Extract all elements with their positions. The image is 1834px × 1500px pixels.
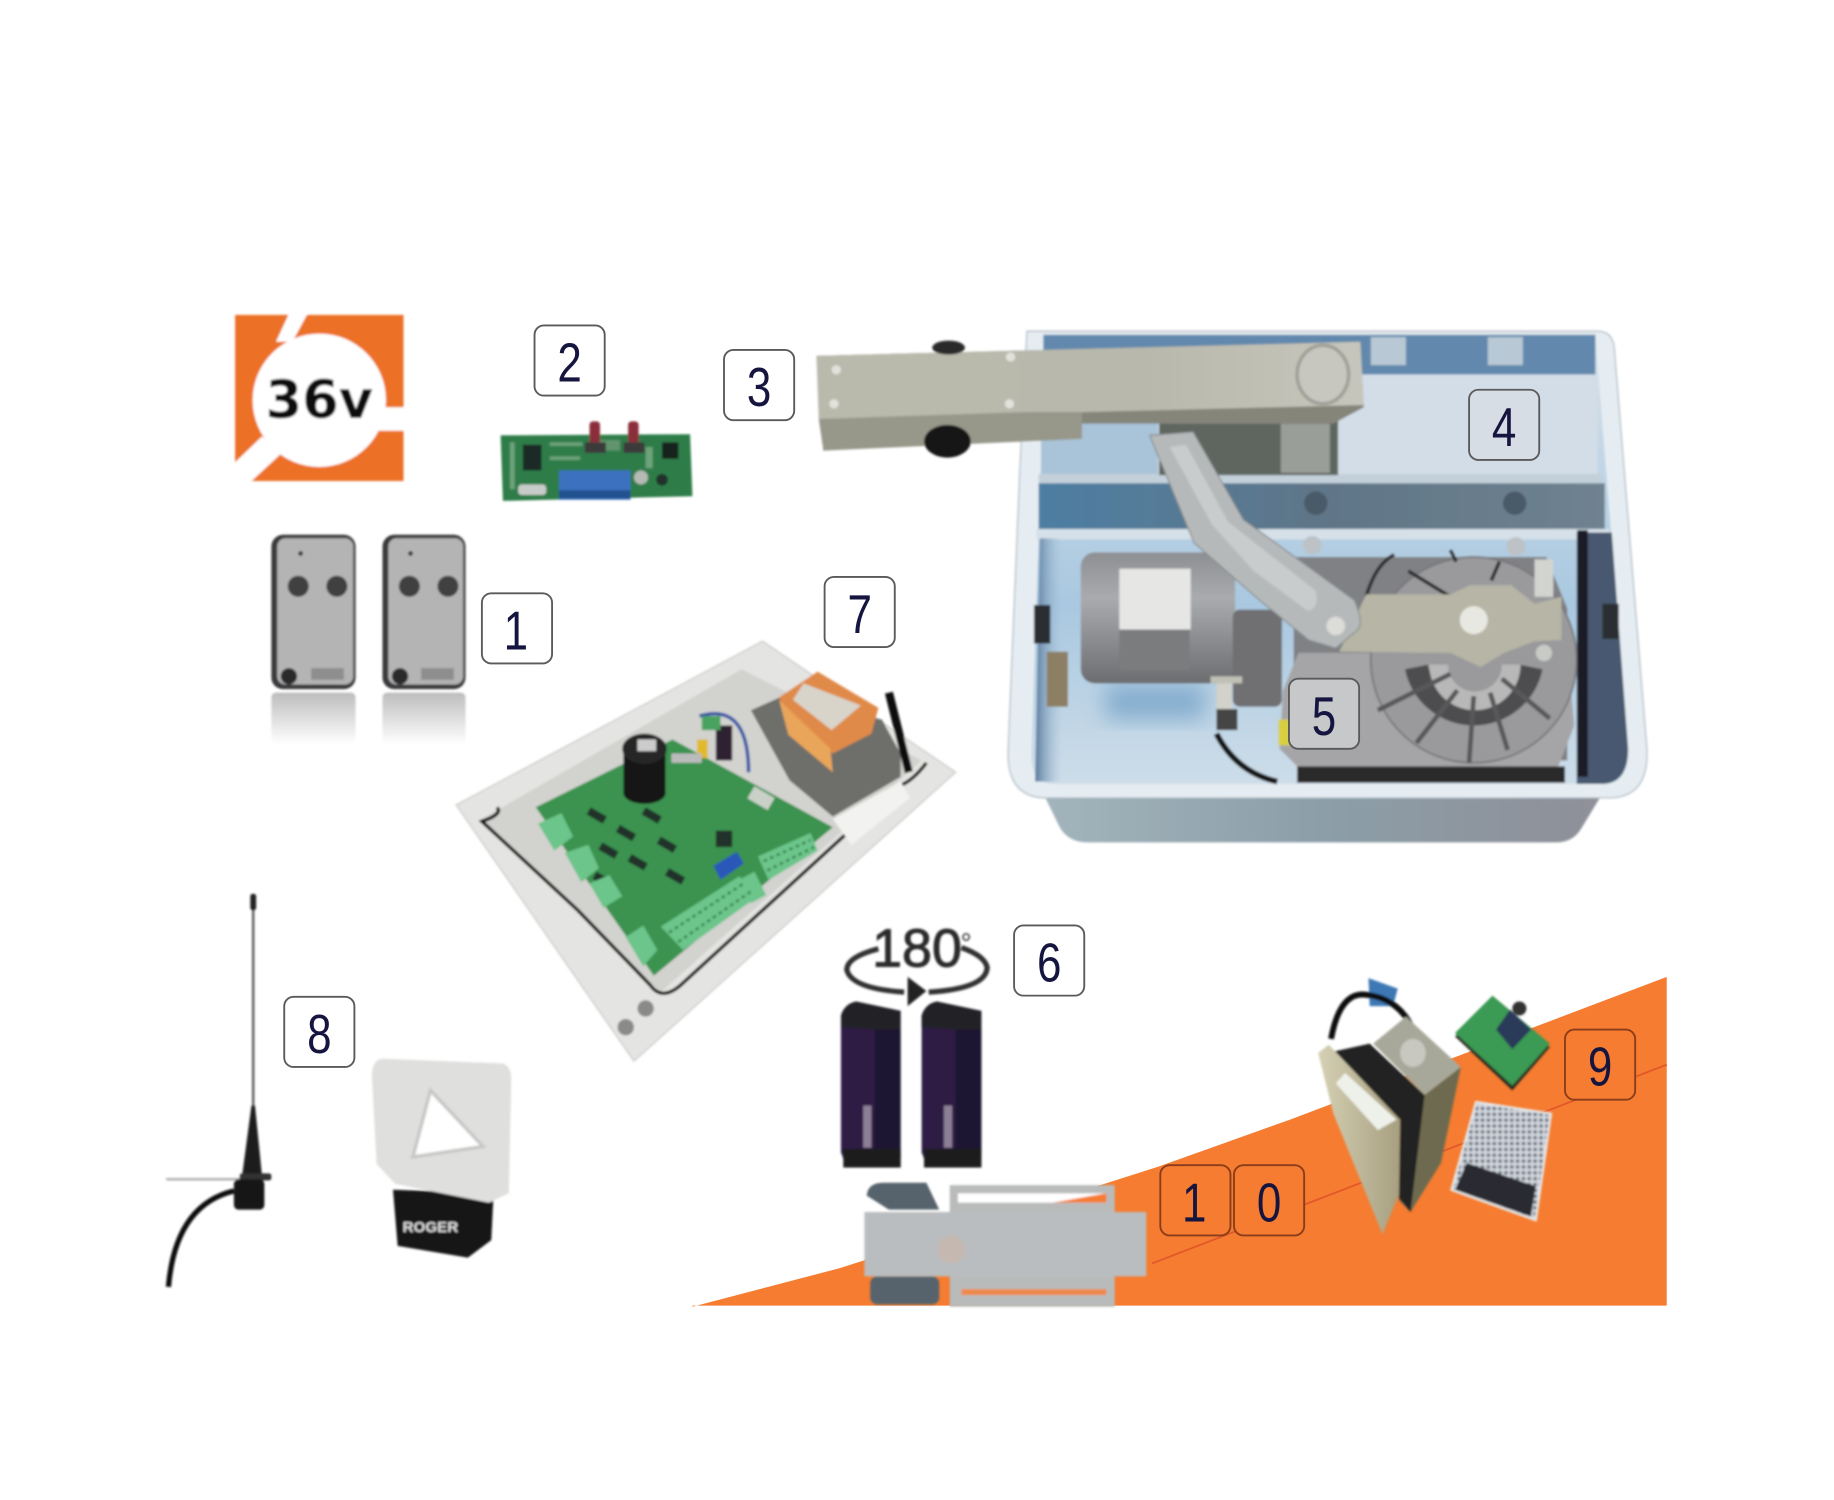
blue connector — [1368, 978, 1398, 1006]
label 2: 2 — [557, 332, 582, 394]
maglock plate — [1318, 1045, 1400, 1234]
sensor cable and connector — [1211, 530, 1583, 782]
label 3: 3 — [747, 356, 771, 418]
lock backplate — [950, 1185, 1115, 1307]
power supply — [1452, 1102, 1551, 1220]
rotation symbol — [847, 918, 987, 1006]
white fuse block — [833, 782, 910, 845]
icon: 36v logo — [232, 311, 407, 484]
flashing lamp — [372, 1059, 511, 1258]
label 1: 1 — [504, 600, 528, 662]
lever hub — [1460, 606, 1488, 634]
maglock right block — [1373, 1017, 1461, 1212]
blue trimmer — [713, 852, 744, 880]
label 7: 7 — [847, 583, 872, 645]
upper lever — [1150, 432, 1360, 648]
back wall bands — [1036, 335, 1609, 539]
label 10: 0 — [1257, 1172, 1281, 1234]
label 7 — [825, 577, 895, 647]
floor shadow below motor — [1105, 684, 1205, 720]
label 5: 5 — [1312, 685, 1336, 747]
label 10 — [1160, 1165, 1304, 1235]
label 6: 6 — [1037, 932, 1061, 994]
motor cylinder — [1081, 552, 1282, 707]
label 3 — [724, 350, 794, 420]
antenna — [166, 894, 271, 1287]
rotation symbol: ° — [961, 927, 972, 958]
capacitor — [622, 734, 667, 804]
blue wires — [699, 714, 749, 772]
left and right wall shading — [1035, 532, 1628, 784]
control unit — [456, 641, 956, 1061]
tray interior — [1031, 335, 1628, 784]
number labels — [284, 325, 1635, 1235]
gasket — [482, 763, 926, 993]
terminal pins — [669, 840, 814, 942]
remote controls — [271, 535, 466, 744]
terminal blocks — [538, 813, 818, 966]
lock dark rollers — [867, 1183, 939, 1304]
corner screw holes — [618, 1000, 654, 1035]
remote right — [382, 535, 466, 689]
label 4 — [1469, 390, 1539, 460]
pivot block under arm — [1159, 419, 1338, 475]
lamp base — [393, 1190, 494, 1258]
lamp lens — [372, 1059, 511, 1203]
label 8 — [284, 997, 354, 1067]
photocells — [841, 918, 987, 1168]
label 8: 8 — [307, 1003, 332, 1065]
gearbox housing — [1280, 536, 1577, 783]
tray rim — [1008, 331, 1647, 798]
rotation symbol: 180 — [872, 918, 962, 978]
label 10: 1 — [1182, 1172, 1206, 1234]
cell right — [922, 1001, 981, 1168]
label 2 — [535, 325, 605, 396]
orange diagonal background — [692, 977, 1667, 1307]
label 5 — [1289, 679, 1359, 749]
steel operating arm — [816, 341, 1364, 458]
lock body — [864, 1212, 1146, 1276]
cell left — [841, 1001, 901, 1168]
receiver board — [501, 421, 692, 501]
flashing lamp: ROGER — [403, 1219, 458, 1236]
gate motor box — [816, 331, 1647, 842]
enclosure interior — [482, 669, 922, 992]
label 9: 9 — [1588, 1036, 1612, 1098]
icon: 36v logo: 36v — [266, 370, 373, 431]
lock cylinder — [937, 1235, 965, 1263]
maglock cable — [1331, 994, 1418, 1041]
maglock dark core — [1328, 1044, 1425, 1212]
tray outer body — [1039, 784, 1608, 842]
label 1 — [482, 593, 552, 663]
label 9 — [1565, 1030, 1635, 1100]
transformer cable — [889, 693, 909, 772]
chips — [587, 786, 775, 888]
label 4: 4 — [1492, 396, 1516, 458]
lower lever — [1339, 585, 1561, 667]
remote reflections — [271, 693, 466, 744]
transformer — [751, 672, 901, 817]
enclosure shell — [456, 641, 956, 1061]
label 6 — [1014, 925, 1084, 996]
maglock stud — [1400, 1039, 1426, 1067]
relay board — [1455, 996, 1550, 1090]
yellow and dark capacitors — [671, 716, 732, 763]
remote left — [271, 535, 356, 689]
circuit board — [536, 739, 833, 976]
electric lock — [864, 1183, 1146, 1307]
side bumpers and bracket — [1034, 604, 1619, 707]
lamp triangle — [413, 1090, 483, 1157]
magnetic lock and power supply — [1318, 978, 1551, 1234]
